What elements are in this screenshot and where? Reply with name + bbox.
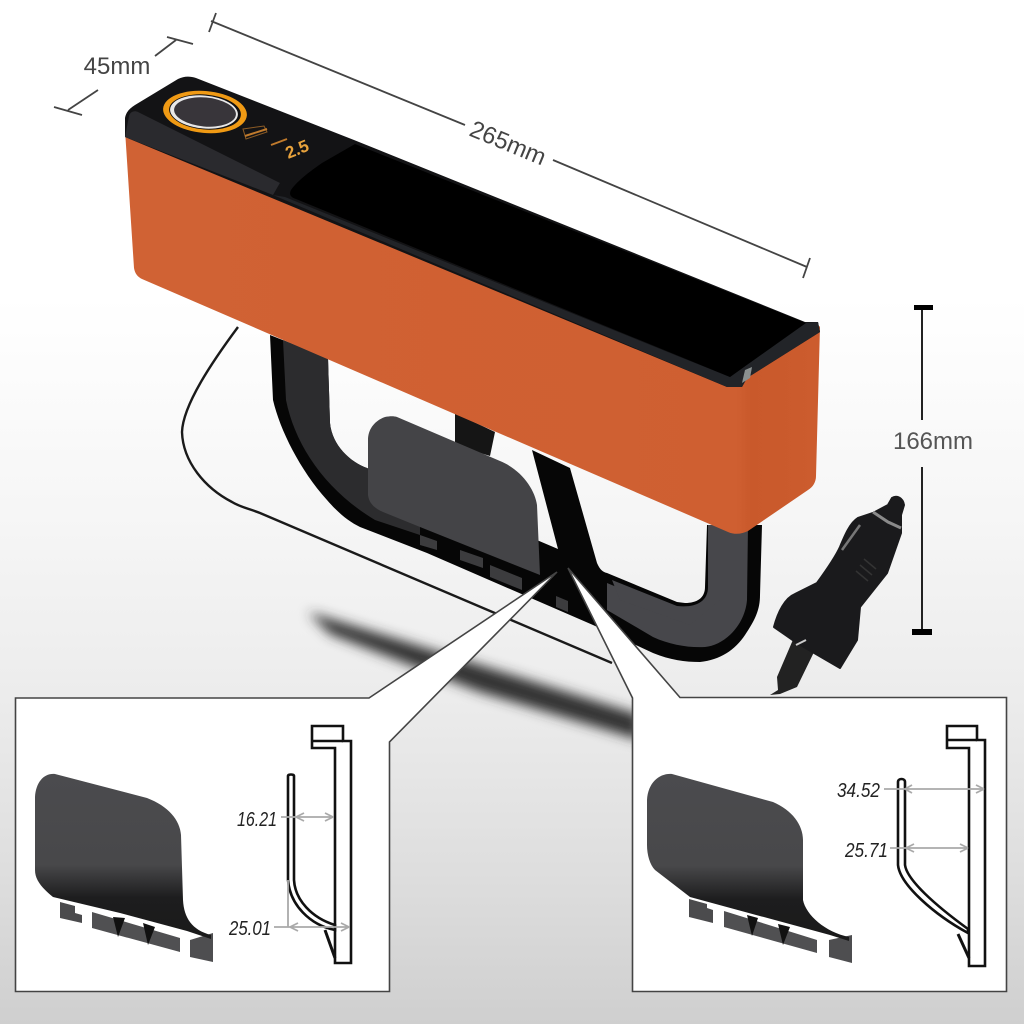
USB ports: [243, 126, 287, 145]
label 25.71: 25.71: [844, 840, 888, 862]
clip tab in place: [368, 416, 540, 575]
bracket frame: [270, 335, 762, 662]
tray opening: [290, 144, 806, 377]
tray rim: [273, 195, 820, 387]
label 16.21: 16.21: [237, 809, 277, 831]
label 25.01: 25.01: [228, 918, 271, 940]
dimension: 265mm: [209, 13, 810, 278]
dimension: 45mm: 45mm: [84, 53, 150, 80]
black top panel: [125, 77, 820, 387]
voltage display: 2.5: [283, 136, 312, 163]
measure arrows: [274, 813, 349, 931]
tab illustration: [35, 774, 213, 962]
power ring: [161, 87, 249, 137]
tab illustration: [647, 774, 852, 963]
front corner highlight: [742, 367, 752, 383]
top front bevel: [125, 111, 280, 195]
charging cable: [182, 327, 612, 663]
center post: [455, 413, 495, 456]
right detail panel: [568, 568, 1006, 992]
dimension: 166mm: [893, 305, 973, 635]
ground shadow: [308, 612, 640, 740]
label 34.52: 34.52: [837, 780, 880, 802]
frame right arm face: [607, 525, 748, 647]
orange front: [125, 130, 820, 534]
dimension: 45mm: [54, 37, 193, 115]
dimension: 265mm: 265mm: [466, 116, 550, 171]
frame left arm face: [283, 340, 420, 535]
left detail panel: [16, 572, 557, 992]
side profile drawing: [288, 726, 351, 963]
car plug: [770, 497, 904, 695]
measure arrows: [884, 785, 984, 852]
dimension: 166mm: 166mm: [893, 428, 973, 455]
organizer box: [125, 77, 820, 534]
side profile drawing: [898, 726, 985, 966]
clip teeth: [420, 535, 568, 612]
